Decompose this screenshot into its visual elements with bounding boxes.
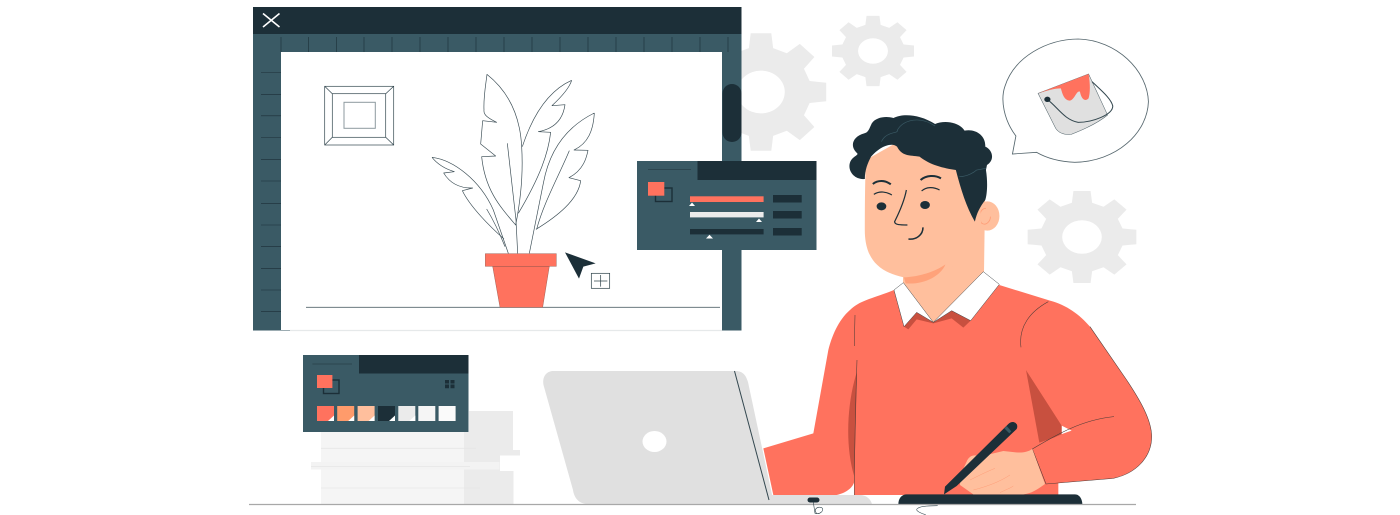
- right arm: [1021, 301, 1152, 484]
- panel: design software window: [253, 7, 742, 330]
- colour swatches: [317, 406, 456, 421]
- laptop button: [808, 498, 820, 502]
- palette background: [303, 355, 468, 432]
- laptop: [543, 371, 872, 504]
- smile: [908, 227, 923, 239]
- panel: paper stack: [311, 411, 520, 504]
- laptop logo: [642, 431, 666, 452]
- person: [763, 115, 1152, 495]
- canvas bottom edge: [290, 330, 722, 332]
- laptop screen back: [543, 371, 774, 504]
- bucket rivet: [1044, 97, 1050, 102]
- bucket handle: [1047, 82, 1113, 122]
- icon: close cross: [263, 14, 280, 27]
- dark slider: [690, 228, 802, 238]
- panel: colour palette: [303, 355, 468, 432]
- eyelids: [874, 188, 940, 195]
- icon: large gear: [696, 33, 826, 151]
- chin shadow: [904, 264, 945, 284]
- slider panel title line: [648, 168, 691, 170]
- sweater contour lines: [854, 302, 1152, 495]
- floor line: [306, 306, 720, 309]
- slider panel header: [698, 161, 816, 180]
- bucket paint: [1038, 74, 1090, 101]
- finger lines: [970, 468, 1013, 493]
- speech bubble with paint bucket: [1003, 39, 1148, 162]
- sweater: [763, 272, 1152, 495]
- outline square: [656, 188, 672, 202]
- colour square: [648, 182, 664, 196]
- stack light front: [321, 432, 464, 504]
- palette outline square: [324, 380, 339, 394]
- bucket body: [1038, 74, 1108, 134]
- palette colour square: [317, 375, 332, 388]
- icon: right gear: [1028, 191, 1136, 283]
- sweater shadow under arm: [1026, 370, 1062, 443]
- window frame: [253, 34, 742, 330]
- sweater shadow left side: [848, 372, 857, 477]
- laptop hinge line: [734, 371, 769, 500]
- icon: cursor arrow: [565, 252, 596, 279]
- sweater body: [763, 285, 1062, 495]
- window title bar: [253, 7, 742, 34]
- canvas: [281, 52, 722, 330]
- icon: small gear: [832, 16, 914, 86]
- hand with stylus on tablet: [898, 422, 1082, 504]
- stack page lines: [311, 448, 480, 488]
- light slider: [690, 211, 802, 222]
- neck: [903, 200, 985, 323]
- icon: grid: [445, 380, 454, 388]
- left ruler ticks: [261, 72, 281, 312]
- coral slider: [689, 195, 802, 206]
- scrollbar handle: [722, 84, 742, 142]
- nose: [895, 190, 907, 225]
- icon: add box: [591, 273, 610, 288]
- palette title line: [312, 363, 352, 365]
- cables under desk: [813, 502, 938, 515]
- panel: sliders: [637, 161, 816, 250]
- plant: [306, 74, 720, 307]
- laptop base: [760, 495, 872, 504]
- eyes: [877, 201, 930, 210]
- stylus: [944, 422, 1017, 494]
- plant pot: [485, 254, 556, 307]
- ear: [975, 201, 999, 231]
- sweater shadow under collar: [904, 311, 971, 329]
- stack dark side: [464, 411, 520, 504]
- drawing tablet: [898, 494, 1082, 504]
- slider panel background: [637, 161, 816, 250]
- picture frame: [325, 86, 394, 145]
- palette header: [359, 355, 468, 374]
- hand: [960, 449, 1045, 494]
- plant leaves: [432, 74, 594, 253]
- top ruler ticks: [281, 37, 728, 52]
- stack page bar: [311, 462, 500, 470]
- hair: [849, 115, 992, 222]
- face: [865, 143, 983, 278]
- eyebrows: [873, 176, 941, 184]
- collar: [894, 272, 999, 327]
- bubble outline: [1003, 39, 1148, 162]
- stylus band: [1004, 426, 1011, 433]
- desk line: [249, 504, 1136, 506]
- hair curl lines: [881, 120, 986, 177]
- head: [849, 115, 999, 284]
